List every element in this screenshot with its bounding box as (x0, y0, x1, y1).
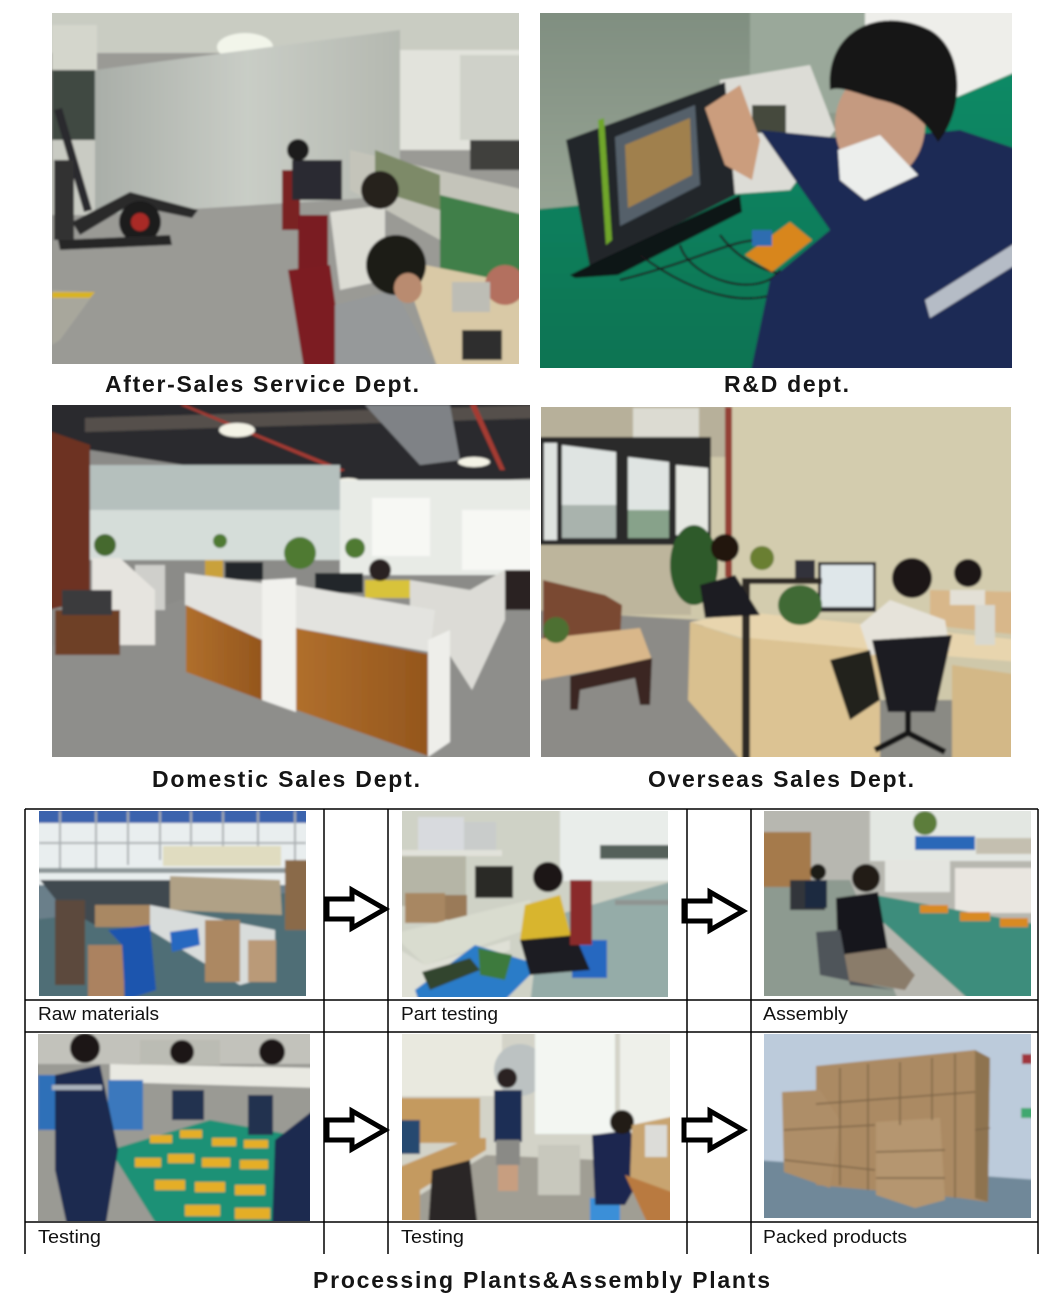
arrow: testing to packed products (684, 1111, 743, 1149)
caption: domestic sales: Domestic Sales Dept. (152, 766, 420, 792)
label: testing 1: Testing (38, 1227, 101, 1247)
photo: domestic sales department (40, 395, 540, 765)
section title: Processing Plants&Assembly Plants (313, 1267, 770, 1293)
arrow: testing to testing (327, 1111, 385, 1149)
photo: part testing (402, 811, 668, 997)
caption: R&D: R&D dept. (724, 371, 849, 397)
caption: after-sales: After-Sales Service Dept. (105, 371, 419, 397)
photo: testing, yellow instruments (38, 1034, 310, 1221)
photo: assembly (764, 811, 1031, 996)
caption: overseas sales: Overseas Sales Dept. (648, 766, 914, 792)
photo: packed products (764, 1034, 1031, 1218)
photo: testing, lab room (402, 1034, 670, 1220)
photo: raw materials (39, 811, 306, 996)
label: assembly: Assembly (763, 1004, 848, 1024)
table grid (25, 809, 1038, 1254)
photo: overseas sales department (530, 395, 1021, 765)
label: testing 2: Testing (401, 1227, 464, 1247)
arrow: part testing to assembly (684, 892, 743, 930)
label: raw materials: Raw materials (38, 1004, 159, 1024)
arrow: raw materials to part testing (327, 890, 385, 928)
photo: after-sales service department (40, 5, 530, 375)
label: packed products: Packed products (763, 1227, 907, 1247)
photo: R&D department (530, 5, 1020, 375)
label: part testing: Part testing (401, 1004, 498, 1024)
